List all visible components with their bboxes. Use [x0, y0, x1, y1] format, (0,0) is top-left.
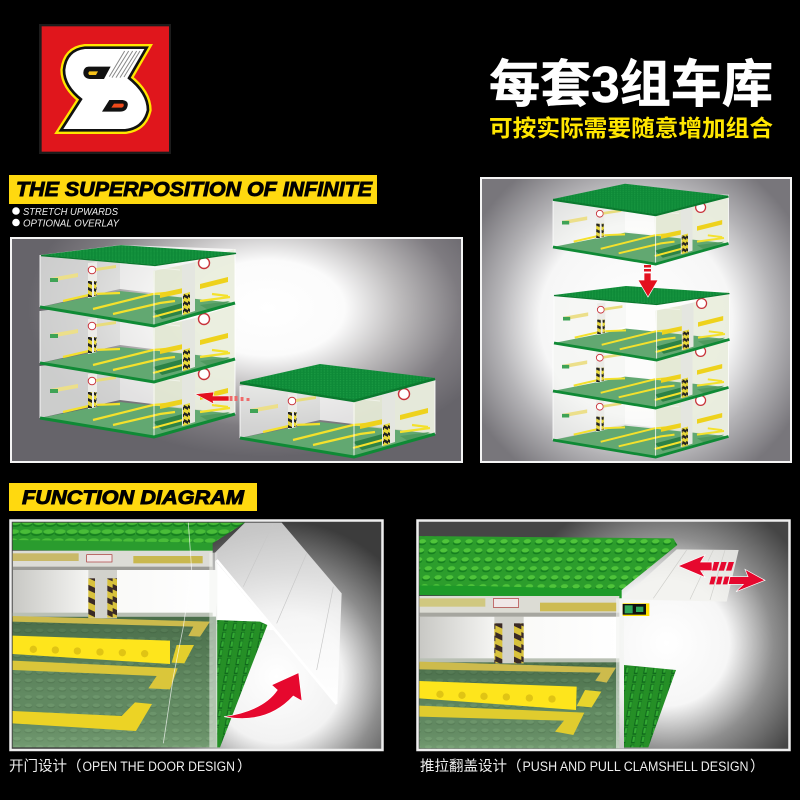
opened door: [215, 523, 342, 704]
side baseplate: [624, 665, 676, 747]
panel frame: push and pull cover: [418, 520, 790, 750]
caption: push and pull clamshell design: PUSH AND PULL CLAMSHELL DESIGN: [522, 759, 748, 774]
pillar: [494, 616, 524, 663]
heading banner: function diagram: [9, 483, 257, 511]
yellow floor markings: [419, 662, 616, 735]
stacked garages: [553, 286, 730, 457]
heading banner: the superposition of infinite: THE SUPERPOSITION OF INFINITE: [16, 179, 373, 201]
arrow: push left: [678, 555, 734, 577]
back wall: [13, 570, 216, 618]
arrow: pull right: [709, 569, 765, 592]
arrow: down: [638, 265, 658, 297]
bullet list: STRETCH UPWARDS: [23, 206, 118, 218]
single garage above: [553, 184, 728, 264]
heading banner: function diagram: FUNCTION DIAGRAM: [22, 488, 245, 509]
sliding cover: [622, 549, 739, 602]
arrow: door opens: [224, 673, 302, 719]
title: 每套3组车库: [489, 56, 773, 113]
yellow floor markings: [13, 616, 210, 731]
light behind door: [215, 560, 273, 630]
acrylic edge: [209, 553, 217, 747]
pillar: [88, 570, 117, 618]
panel: push and pull cover: [417, 521, 789, 749]
caption: push and pull clamshell design: ）: [750, 758, 764, 775]
caption: open the door design: OPEN THE DOOR DESIGN: [82, 759, 235, 774]
upper acrylic band: [419, 596, 619, 617]
caption: push and pull clamshell design: 推拉翻盖设计（: [420, 758, 522, 775]
back wall: [419, 616, 619, 663]
subtitle: 可按实际需要随意增加组合: [489, 115, 773, 141]
bullet list: OPTIONAL OVERLAY: [23, 218, 120, 230]
floor baseplate: [13, 613, 216, 747]
logo: S brand mark: [39, 24, 171, 154]
floor baseplate: [419, 658, 619, 748]
panel: open the door: [11, 521, 383, 749]
roof baseplate: [419, 536, 677, 598]
side baseplate: [217, 620, 267, 747]
caption: open the door design: ）: [237, 758, 252, 775]
bullet list: [12, 206, 120, 230]
arrow: slide in: [195, 392, 248, 404]
single garage: [240, 364, 435, 457]
panel frame: open the door: [10, 520, 382, 750]
caption: open the door design: 开门设计（: [9, 758, 82, 775]
panel: overlay side view: [11, 238, 462, 462]
stacked garages: [40, 245, 236, 437]
heading banner: the superposition of infinite: [9, 175, 377, 204]
acrylic edge: [616, 598, 624, 748]
icon: exit sign: [623, 603, 649, 616]
roof baseplate: [13, 523, 245, 553]
panel: overlay top view: [481, 178, 791, 462]
upper acrylic band: [13, 551, 213, 570]
